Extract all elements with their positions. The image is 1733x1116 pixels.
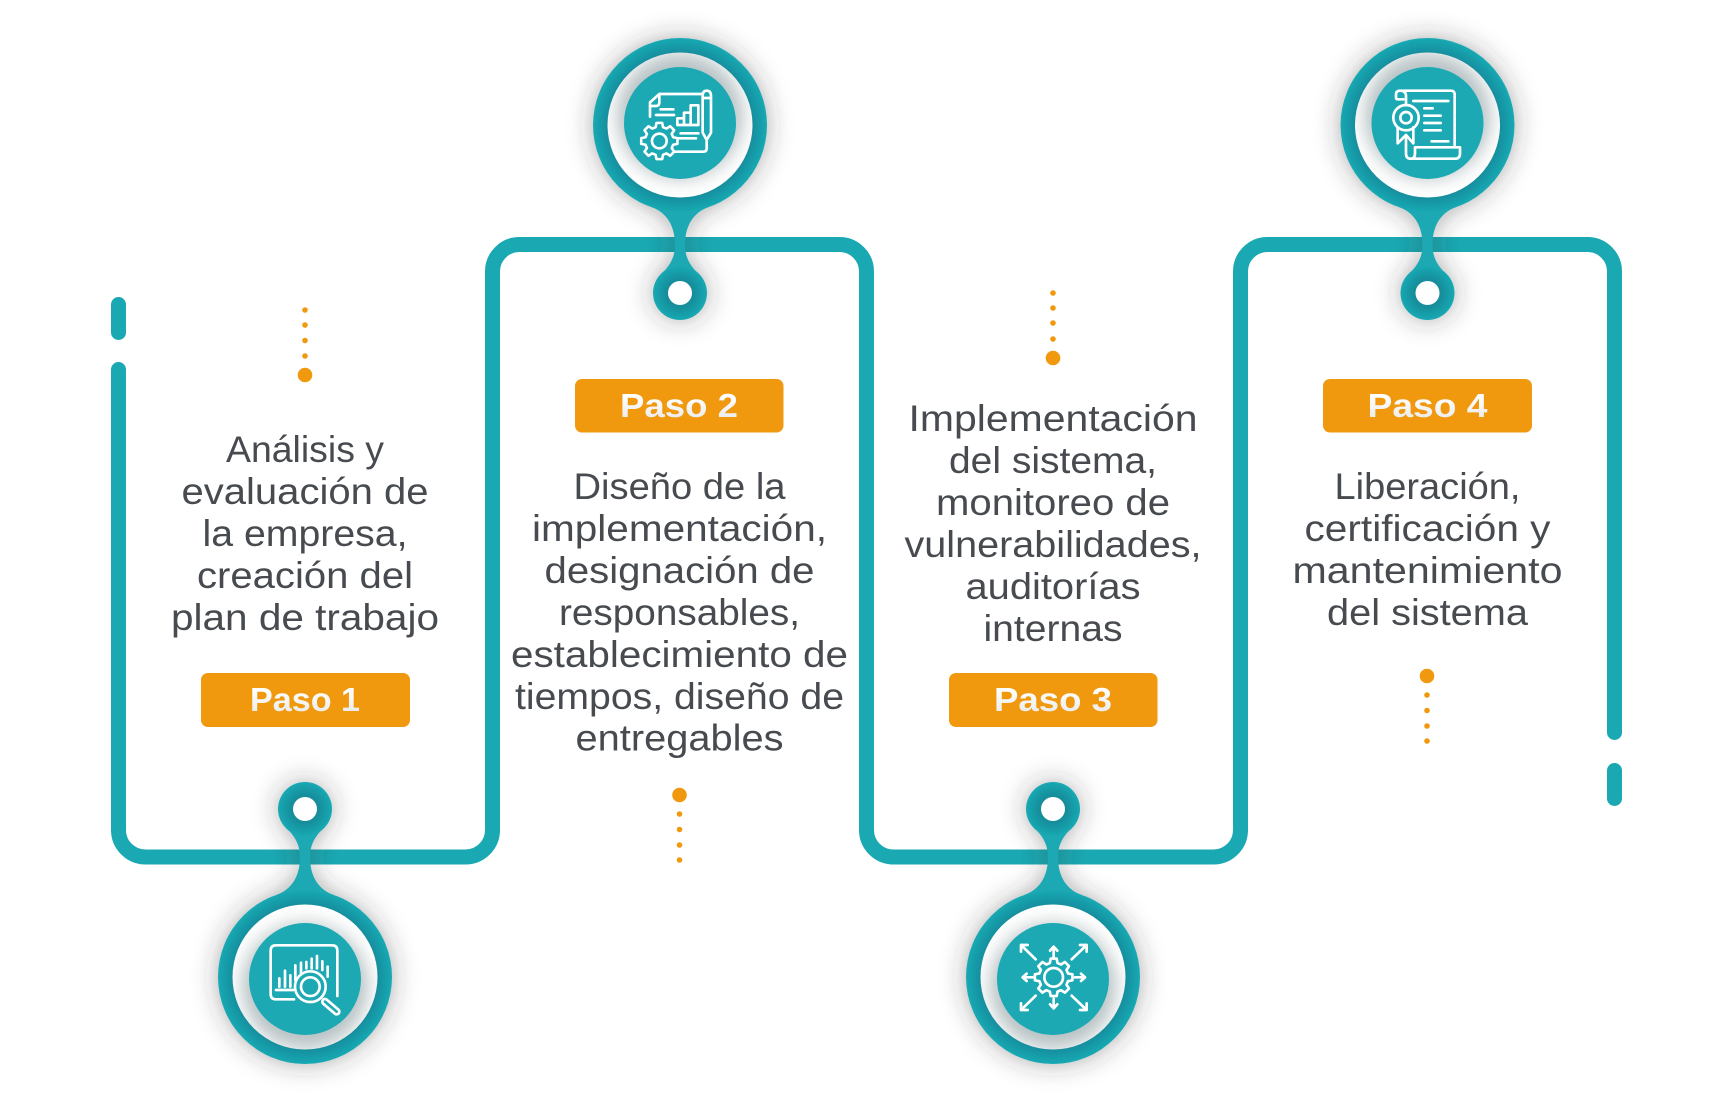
- line start cap: [111, 304, 126, 332]
- text: step 2 description: establecimiento de: [511, 634, 848, 675]
- text: step 2 description: entregables: [576, 718, 784, 758]
- text: step 2 description: implementación,: [532, 508, 827, 549]
- text: step 1 description: plan de trabajo: [171, 597, 439, 638]
- badge: Paso 2: Paso 2: [620, 388, 738, 425]
- text: step 4 description: Liberación,: [1334, 466, 1520, 507]
- dots: step 1: [298, 307, 312, 382]
- text: step 1 description: evaluación de: [182, 471, 428, 512]
- badge: Paso 1: Paso 1: [250, 682, 360, 719]
- icon: certificate scroll: [1393, 91, 1460, 159]
- badge: Paso 2: [575, 379, 784, 432]
- text: step 2 description: tiempos, diseño de: [515, 676, 844, 717]
- text: step 1 description: creación del: [197, 555, 413, 596]
- badge: Paso 4: [1323, 379, 1532, 432]
- dots: step 2: [672, 788, 687, 863]
- step 4 node: [1340, 38, 1514, 320]
- text: step 2 description: designación de: [544, 550, 814, 591]
- icon: chart with magnifier: [271, 945, 337, 1012]
- text: step 2 description: [511, 466, 848, 758]
- connector line: [118, 244, 1614, 857]
- text: step 4 description: mantenimiento: [1292, 550, 1562, 591]
- step 2 node: [593, 38, 767, 320]
- text: step 3 description: Implementación: [908, 398, 1198, 439]
- badge: Paso 3: [949, 673, 1158, 727]
- text: step 4 description: [1292, 466, 1562, 633]
- text: step 3 description: [904, 398, 1202, 649]
- text: step 3 description: del sistema,: [949, 440, 1157, 481]
- text: step 3 description: vulnerabilidades,: [904, 524, 1202, 565]
- text: step 3 description: internas: [984, 608, 1122, 649]
- text: step 1 description: la empresa,: [202, 513, 408, 554]
- text: step 2 description: responsables,: [559, 592, 800, 633]
- icon: document with gear and pencil: [641, 91, 711, 159]
- text: step 3 description: monitoreo de: [936, 482, 1170, 523]
- step 1 node: [218, 782, 392, 1064]
- text: step 2 description: Diseño de la: [574, 466, 786, 507]
- text: step 1 description: [171, 429, 439, 638]
- badge: Paso 4: Paso 4: [1368, 388, 1488, 425]
- dots: step 4: [1420, 669, 1434, 744]
- line end cap: [1607, 770, 1622, 798]
- icon: gear with arrows: [1021, 945, 1087, 1010]
- badge: Paso 3: Paso 3: [994, 682, 1112, 719]
- text: step 3 description: auditorías: [966, 566, 1140, 607]
- step 3 node: [966, 782, 1140, 1064]
- dots: step 3: [1046, 290, 1060, 365]
- text: step 4 description: certificación y: [1304, 508, 1551, 549]
- badge: Paso 1: [201, 673, 410, 727]
- text: step 1 description: Análisis y: [226, 429, 384, 470]
- text: step 4 description: del sistema: [1327, 592, 1528, 633]
